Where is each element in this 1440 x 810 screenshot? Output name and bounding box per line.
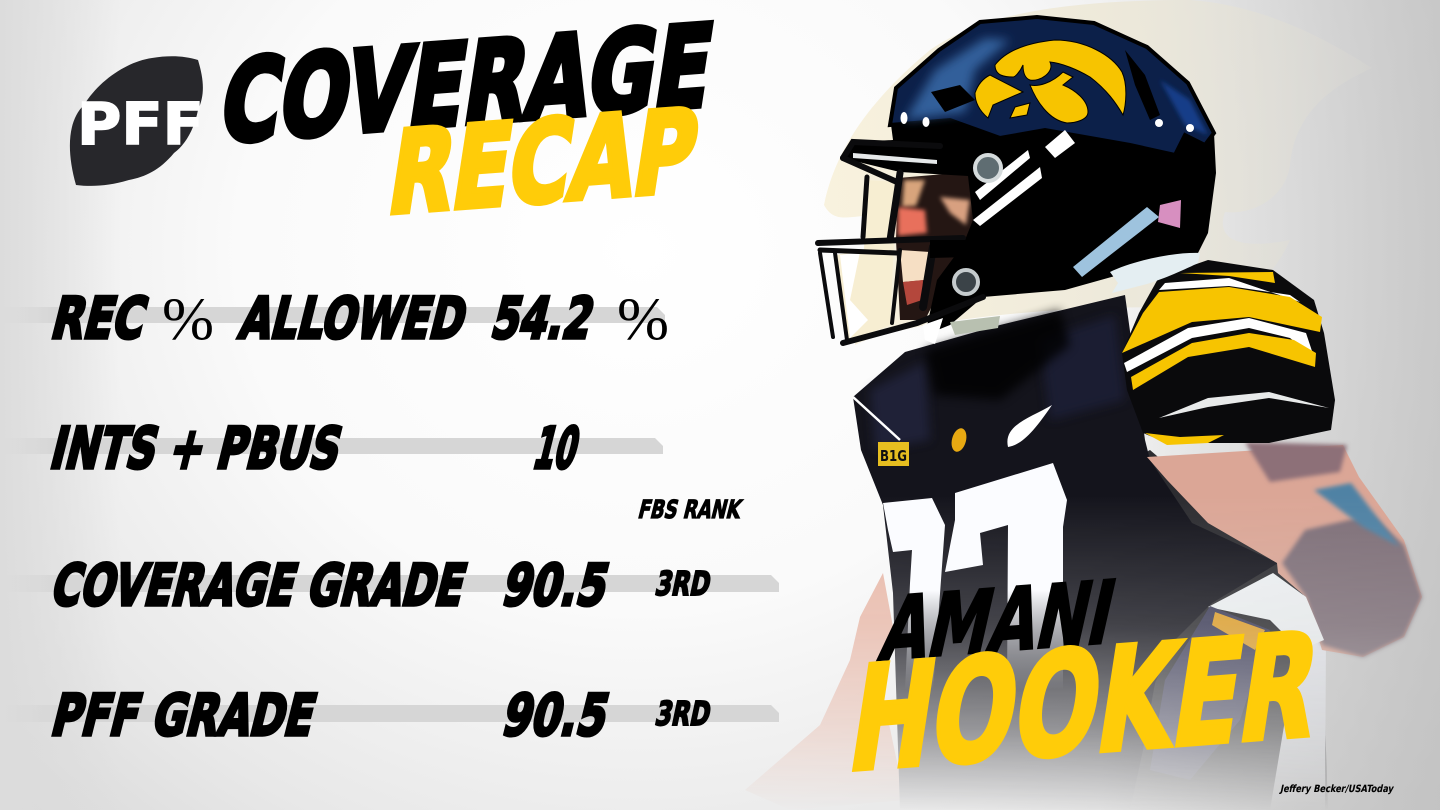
shoulder pad (1122, 260, 1335, 443)
wristband and glove (1208, 573, 1324, 650)
heading: FBS rank: FBS RANK (636, 494, 746, 524)
row: PFF grade: 90.5 (497, 682, 616, 749)
helmet (847, 122, 1216, 330)
row: Coverage grade: COVERAGE GRADE (46, 552, 473, 619)
left forearm (748, 573, 899, 788)
row: PFF grade (0, 682, 779, 749)
arm (1147, 445, 1422, 657)
row: Coverage grade: 3RD (652, 564, 715, 603)
face (896, 172, 975, 320)
row: Coverage grade: 90.5 (497, 552, 616, 619)
background hawk watermark (824, 0, 1372, 345)
facemask interior (836, 180, 897, 342)
ear holes (975, 155, 1001, 181)
row: PFF grade: PFF GRADE (46, 682, 323, 749)
row: PFF grade: 3RD (652, 694, 715, 733)
row: INTs + PBUs (0, 415, 663, 482)
row: INTs + PBUs: INTS + PBUS (45, 415, 349, 482)
lower body (1132, 450, 1328, 801)
row: Rec % allowed: 54.2 (486, 285, 601, 352)
row: INTs + PBUs: 10 (528, 415, 586, 482)
big ten patch (878, 442, 909, 466)
swoosh (1007, 405, 1052, 447)
chin strap (1073, 207, 1159, 277)
jersey number (883, 463, 1067, 690)
logo: PFF football (70, 56, 204, 186)
row: Rec % allowed: REC (46, 285, 154, 352)
photo credit: Jeffery Becker/USAToday (1279, 784, 1395, 795)
hawk patch (952, 428, 966, 452)
row: Rec % allowed: % (617, 286, 669, 352)
row: Rec % allowed (0, 285, 669, 352)
player first name: AMANI: AMANI (872, 561, 1125, 681)
jersey (853, 295, 1278, 810)
row: Rec % allowed: ALLOWED (234, 285, 474, 352)
helmet dots and padding (900, 112, 1194, 226)
logo: PFF football: PFF (77, 90, 204, 158)
big ten patch: B1G (880, 447, 907, 465)
player photo illustration (745, 17, 1422, 810)
title: RECAP: RECAP (381, 85, 706, 240)
row: Rec % allowed: % (162, 286, 214, 352)
hawk logo (975, 40, 1126, 123)
facemask (818, 142, 983, 343)
